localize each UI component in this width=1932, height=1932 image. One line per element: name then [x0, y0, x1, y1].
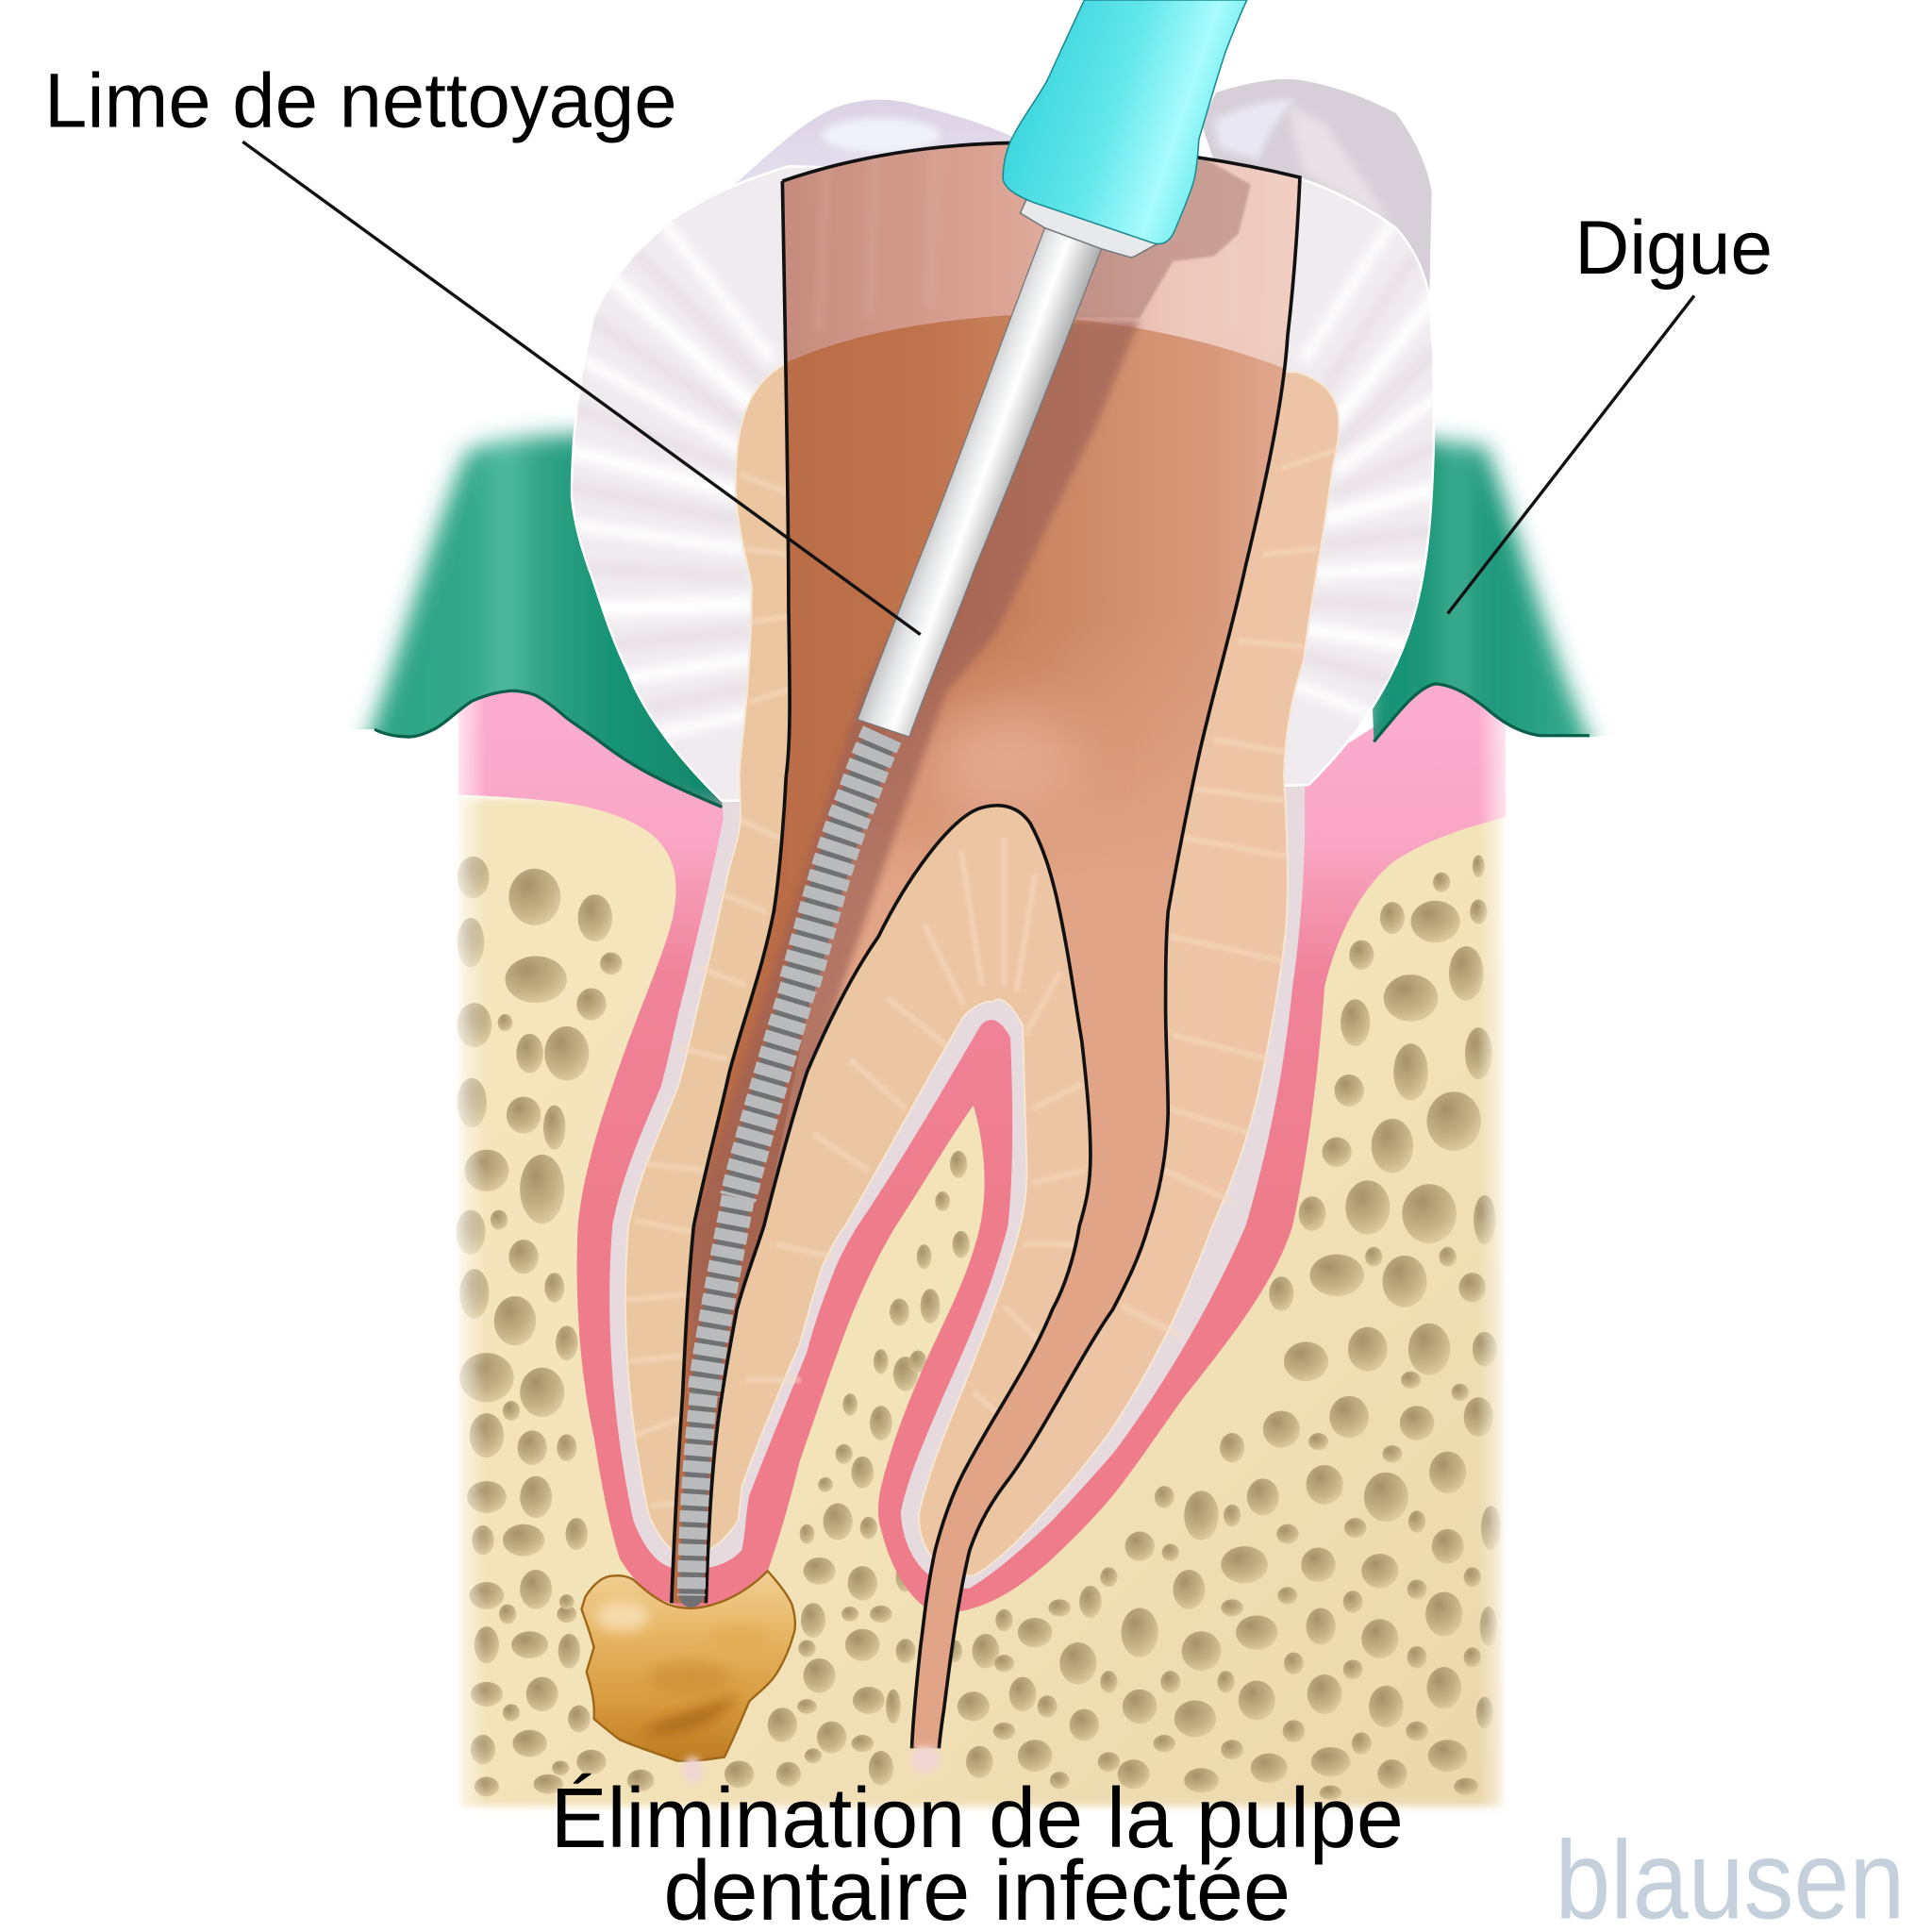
dentin tubule streaks: [626, 450, 1337, 1506]
bone tissue: [456, 798, 1503, 1807]
handle shadow on access cavity: [1059, 156, 1251, 318]
leader line: Digue: [1448, 295, 1694, 613]
abscess shading: [595, 1602, 769, 1735]
leader line: Lime de nettoyage: [242, 142, 921, 635]
lighter lower pulp and right canal: [772, 661, 1193, 1748]
access cavity upper area: [784, 145, 1298, 368]
enamel rays: [567, 209, 1441, 740]
dentin: [625, 362, 1339, 1576]
label: Digue: Digue: [1574, 206, 1773, 291]
green rubber dam left: [363, 434, 740, 813]
tooth crown back cusps: [727, 79, 1432, 302]
soft outer fade of gum and bone: [446, 690, 1518, 1811]
steel shaft: [858, 228, 1102, 737]
abscess: [581, 1571, 795, 1761]
bone pores: [456, 855, 1501, 1800]
pink gum and periodontal ligament: [446, 665, 1518, 1811]
nerve tips: [683, 1746, 941, 1784]
cleaning file instrument: [691, 0, 1247, 1595]
collar: [1020, 200, 1157, 258]
root canal pulp chamber: [670, 142, 1302, 1749]
threaded file tip: [691, 734, 882, 1595]
cyan handle: [1003, 0, 1247, 244]
streaks in access cavity: [820, 148, 1275, 351]
green rubber dam right: [1361, 434, 1595, 764]
light pulp area near the furcation: [928, 709, 1080, 813]
label: Lime de nettoyage: Lime de nettoyage: [44, 58, 677, 144]
periodontal pale band: [609, 770, 1305, 1589]
enamel: [567, 166, 1441, 801]
canal outline: [672, 143, 1300, 1748]
shadow of the file: [690, 321, 1140, 1602]
caption: [551, 1772, 1404, 1932]
caption: Élimination de la pulpe: [551, 1772, 1404, 1866]
